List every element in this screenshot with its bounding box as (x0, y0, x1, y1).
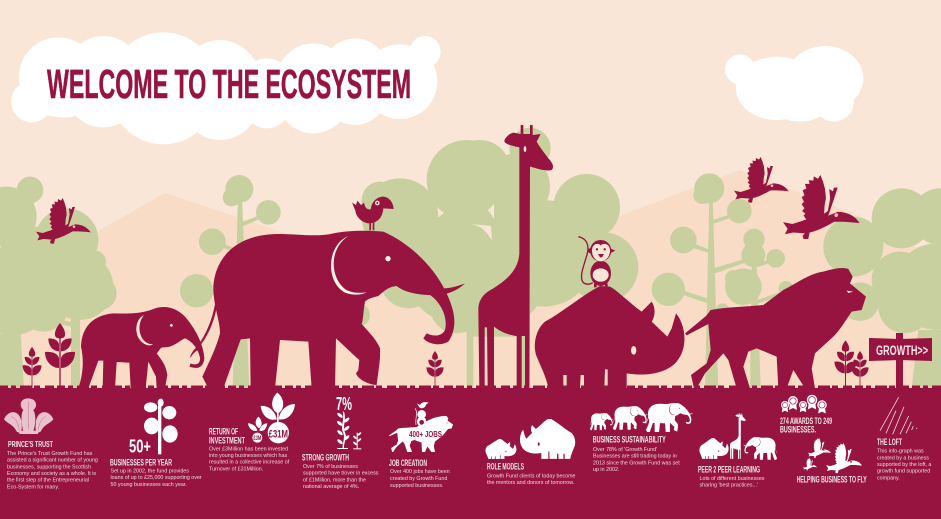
panel: helping business to fly (797, 438, 867, 485)
title: WELCOME TO THE ECOSYSTEM (47, 61, 411, 107)
mountains (0, 170, 941, 388)
cloud: title cloud (11, 32, 441, 144)
panel: businesses per year (110, 399, 202, 488)
heading line two: BUSINESSES. (780, 424, 816, 434)
trees: lollipop tree right (652, 173, 752, 388)
panel: the loft (877, 397, 931, 481)
cloud: right cloud (725, 46, 863, 122)
animal: lion (685, 268, 866, 388)
heading: BUSINESS SUSTAINABILITY (593, 435, 666, 445)
heading: 274 AWARDS TO 249 (780, 416, 832, 426)
body text: loans of up to £25,000 supporting over (110, 475, 202, 481)
heading: BUSINESSES PER YEAR (110, 458, 172, 468)
panel: strong growth (302, 394, 379, 490)
body text: national average of 4%. (303, 484, 359, 490)
body text: sharing 'best practices...' (700, 483, 758, 489)
body text: resulted in a collective increase of (209, 460, 290, 466)
body text: supported have t/over in excess (303, 471, 379, 477)
trees: behind big elephant (347, 140, 507, 333)
panel: job creation (389, 402, 453, 489)
heading line two: INVESTMENT (209, 435, 245, 445)
icon: diagonal lines (880, 397, 917, 434)
body text: 50 young businesses each year. (110, 482, 187, 488)
icon: two rhinos (485, 419, 575, 459)
body text: into young businesses which has (209, 453, 287, 459)
body text: Over 400 jobs have been (390, 469, 450, 475)
body text: the mentors and donors of tomorrow. (487, 480, 574, 486)
icon: leafy stem (144, 399, 178, 454)
animal: flying bird large right (783, 175, 860, 239)
panel: business sustainability (590, 403, 693, 473)
body text: up in 2002. (593, 467, 619, 473)
heading: THE LOFT (877, 437, 902, 447)
icon: growing plants £3M to £31M: £31M (269, 429, 288, 441)
icon: growing plants £3M to £31M: £3M (253, 436, 261, 442)
body text: assisted a significant number of young (7, 458, 98, 464)
body text: created by a business (877, 455, 929, 461)
icon: growing plants £3M to £31M (248, 393, 295, 443)
panel: prince's trust (4, 398, 98, 490)
body text: Over £3Million has been invested (209, 446, 288, 452)
growth signpost (869, 333, 932, 388)
animal: baby elephant (78, 307, 204, 388)
icon: three elephants (590, 403, 693, 432)
icon: three feathers (4, 398, 53, 434)
heading: PRINCE'S TRUST (8, 440, 53, 449)
grass edge (0, 386, 941, 388)
heading: PEER 2 PEER LEARNING (698, 464, 760, 474)
heading: ROLE MODELS (487, 462, 524, 472)
detail: peach gaps in giraffe forest (470, 204, 494, 240)
heading: HELPING BUSINESS TO FLY (797, 475, 867, 485)
plant group: left (23, 323, 75, 388)
figure: 7%: 7% (336, 394, 352, 414)
icon: lion with monkey and bird: 400+ JOBS (409, 429, 442, 439)
icon: rosettes (781, 395, 827, 414)
body text: supported by the loft, a (877, 462, 931, 468)
plant: centre (426, 351, 444, 388)
body text: Growth Fund clients of today become (487, 473, 576, 479)
body text: company. (877, 475, 900, 481)
body text: This info-graph was (877, 449, 924, 455)
panel: role models (485, 419, 576, 486)
heading: STRONG GROWTH (302, 453, 349, 463)
animal: big elephant (199, 231, 465, 388)
body text: Turnover of £31Million. (209, 466, 263, 472)
animal: rhino (535, 286, 684, 388)
trees: small round tree (716, 229, 793, 388)
body text: Over 7% of businesses (303, 464, 358, 470)
body text: The Prince's Trust Growth Fund has (7, 451, 92, 457)
body text: created by Growth Fund (390, 476, 447, 482)
body text: of £1Million, more than the (303, 477, 366, 483)
icon: rhino, giraffe and elephant (699, 413, 777, 460)
icon: growth plants (336, 412, 362, 449)
trees: right forest (823, 188, 941, 388)
body text: the first step of the Entrepreneurial (7, 478, 89, 484)
body text: Over 78% of 'Growth Fund' (593, 447, 657, 453)
panel: awards (780, 395, 832, 434)
body text: Businesses are still trading today in (593, 454, 677, 460)
animal: monkey (578, 237, 615, 287)
ground (0, 388, 941, 519)
body text: Set up in 2002, the fund provides (110, 468, 189, 474)
trees: lollipop tree left (180, 175, 281, 388)
body text: growth fund supported (877, 469, 930, 475)
trees: giraffe forest (417, 128, 638, 388)
figure: 50+: 50+ (129, 436, 151, 456)
body text: Eco-System for many. (7, 484, 59, 490)
heading line one: RETURN OF (209, 427, 238, 437)
icon: three birds (803, 438, 862, 473)
body text: Lots of different businesses (700, 476, 764, 482)
trees: left forest (0, 177, 117, 388)
body text: supported businesses. (390, 483, 443, 489)
animal: flying bird left (36, 198, 91, 244)
heading: JOB CREATION (389, 458, 427, 468)
panel: peer 2 peer learning (698, 413, 777, 489)
body text: 2013 since the Growth Fund was set (593, 460, 680, 466)
plant group: right (835, 340, 869, 388)
body text: businesses, supporting the Scottish (7, 464, 91, 470)
animal: flying bird upper right (734, 157, 789, 203)
animal: bird on elephant (352, 197, 394, 230)
animal: giraffe (478, 125, 553, 388)
panel: return of investment (209, 393, 295, 472)
body text: Economy and society as a whole. It is (7, 471, 96, 477)
